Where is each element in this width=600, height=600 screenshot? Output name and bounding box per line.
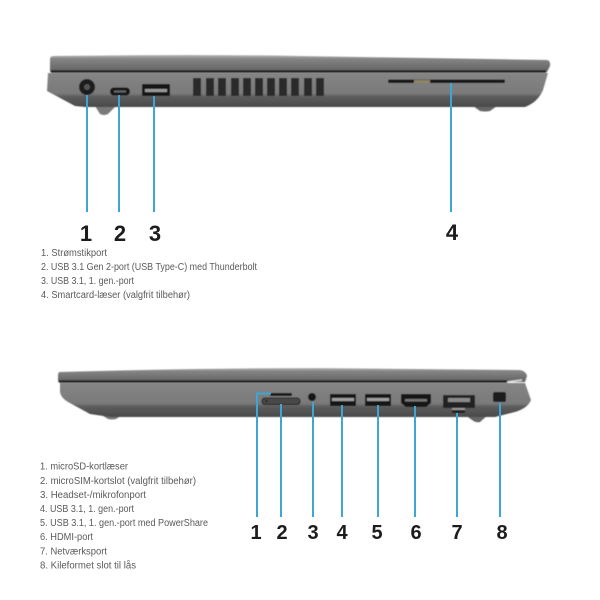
numbers: bottom: 5 [371, 522, 383, 544]
numbers: bottom: 6 [410, 522, 422, 544]
legend: bottom: 1. microSD-kortlæser [40, 462, 129, 472]
numbers: bottom: 1 [250, 522, 262, 544]
port: microSIM tray [262, 398, 300, 404]
hinge seam [51, 70, 546, 73]
port: USB-C [110, 88, 130, 96]
vents [193, 78, 324, 96]
legend: bottom: 7. Netværksport [40, 546, 107, 558]
port: USB-A 1 [330, 394, 356, 406]
smartcard slot [388, 80, 505, 83]
legend: bottom: 2. microSIM-kortslot (valgfrit tilbehør) [40, 476, 196, 487]
numbers: bottom: 3 [307, 522, 319, 544]
rubber feet [95, 106, 116, 115]
legend: bottom: 3. Headset-/mikrofonport [40, 490, 146, 501]
numbers: top: 2 [114, 221, 126, 246]
numbers: bottom: 8 [496, 522, 508, 544]
numbers: top: 3 [149, 221, 161, 246]
port: microSD [270, 393, 292, 396]
lid [50, 55, 550, 72]
chassis base [60, 383, 531, 417]
numbers: top: 4 [446, 220, 459, 245]
numbers: top [80, 220, 459, 246]
legend: bottom: 4. USB 3.1, 1. gen.-port [40, 504, 134, 515]
port: USB-A [142, 84, 170, 96]
legend: top [41, 248, 257, 301]
port: network [443, 395, 475, 413]
legend: bottom: 8. Kileformet slot til lås [40, 560, 136, 572]
legend: bottom: 6. HDMI-port [40, 532, 93, 543]
legend: top: 4. Smartcard-læser (valgfrit tilbehør) [41, 290, 190, 301]
rubber feet [100, 414, 124, 420]
numbers: top: 1 [80, 221, 92, 246]
callout lines: bottom [257, 394, 500, 517]
numbers: bottom: 4 [336, 522, 348, 544]
laptop side view: top [47, 55, 550, 115]
laptop side view: bottom [58, 368, 531, 422]
port: HDMI [401, 394, 431, 407]
numbers: bottom: 2 [276, 522, 288, 544]
legend: top: 1. Strømstikport [41, 248, 107, 259]
legend: top: 2. USB 3.1 Gen 2-port (USB Type-C) med Thunderbolt [41, 262, 257, 273]
callout lines: top [87, 83, 451, 212]
port: audio [308, 393, 316, 401]
legend: top: 3. USB 3.1, 1. gen.-port [41, 276, 134, 287]
hinge seam [59, 380, 508, 383]
chassis base [47, 73, 548, 107]
port: USB-A 2 [365, 394, 391, 406]
numbers: bottom: 7 [451, 522, 463, 544]
numbers: bottom [250, 522, 508, 544]
lid [58, 368, 527, 382]
port: power [79, 79, 95, 95]
legend: bottom: 5. USB 3.1, 1. gen.-port med PowerShare [40, 518, 208, 529]
legend: bottom [40, 462, 208, 572]
port: wedge lock [493, 392, 506, 402]
